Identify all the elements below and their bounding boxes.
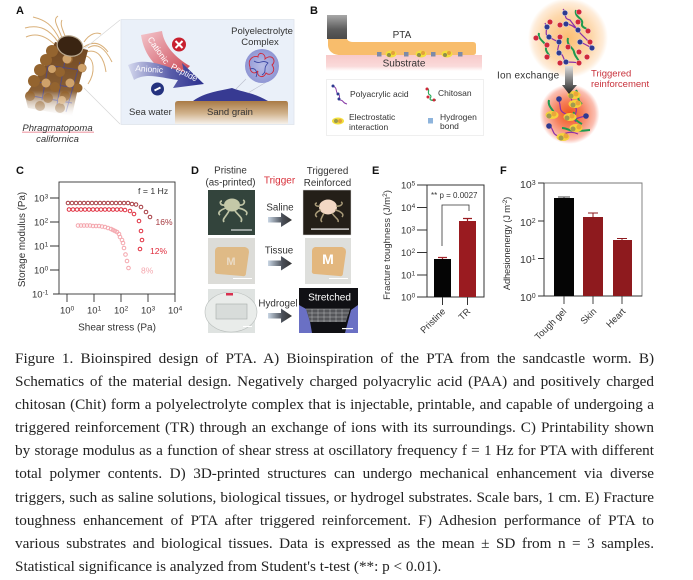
- legend: hydrogen bond: Hydrogen: [440, 112, 477, 122]
- complex title: Polyelectrolyte: [231, 26, 293, 37]
- y tick labels: 10: [401, 180, 412, 192]
- photo: stretched on hydrogel: [299, 288, 358, 333]
- series labels: 12%: [150, 246, 167, 256]
- x tick labels: [60, 306, 183, 316]
- photo: pristine octopus: [208, 190, 255, 235]
- trigger: saline: [266, 202, 294, 227]
- y tick labels: 10: [401, 270, 412, 282]
- axes: [417, 185, 484, 305]
- series labels: [138, 186, 173, 276]
- label F: F: [500, 165, 507, 177]
- figure caption: by storage modulus as a function of shear stress at oscillatory frequency f = 1 Hz for PTA with different: [15, 442, 654, 459]
- figure caption: [15, 350, 654, 575]
- legend: chitosan: Chitosan: [438, 88, 472, 98]
- trigger: hydrogel: Hydrogel: [258, 298, 298, 310]
- substrate: [326, 55, 482, 71]
- column headers: (as-printed): [205, 178, 256, 188]
- label A: A: [16, 5, 24, 17]
- category labels: [533, 306, 628, 342]
- bar: heart: [613, 238, 632, 296]
- y tick labels: 2: [45, 218, 49, 224]
- arrow: cationic peptide: [141, 31, 190, 78]
- axis titles: Storage modulus (Pa): [17, 192, 28, 287]
- trigger: hydrogel: [258, 298, 298, 323]
- x tick labels: 3: [152, 306, 156, 312]
- panel C: storage modulus chart: [16, 165, 183, 334]
- PTA layer: [328, 30, 476, 55]
- chart frame and axes: [50, 182, 175, 302]
- substrate: Substrate: [383, 58, 426, 70]
- category labels: Heart: [604, 306, 628, 329]
- reinforced polymer cluster: [540, 84, 600, 144]
- y tick labels: 5: [412, 180, 416, 188]
- x tick labels: 4: [179, 306, 183, 312]
- panel B: material design schematic: [310, 0, 649, 144]
- y axis title: 2: [382, 193, 389, 197]
- axis titles: [17, 192, 156, 334]
- y tick labels: -1: [43, 290, 49, 296]
- photo: pristine on tissue: [208, 238, 255, 284]
- series labels: 8%: [141, 266, 154, 276]
- y tick labels: 10: [401, 226, 412, 236]
- photo: pristine on hydrogel: [205, 289, 257, 333]
- panel F: adhesion energy chart: [500, 165, 642, 342]
- category labels: Tough gel: [533, 306, 568, 342]
- sand grain: Sand grain: [207, 107, 253, 118]
- y axis title: ): [382, 190, 393, 193]
- label E: E: [372, 165, 379, 177]
- pre-exchange polymer cluster: [528, 0, 608, 78]
- y tick labels: 3: [532, 180, 536, 187]
- y tick labels: 1: [45, 242, 49, 248]
- legend: electrostatic interaction: Electrostatic: [349, 112, 396, 122]
- category labels: Pristine: [418, 306, 447, 335]
- photo: stretched on hydrogel: Stretched: [308, 292, 351, 304]
- x tick labels: 10: [87, 306, 98, 316]
- inset: polyelectrolyte complex formation: [121, 20, 294, 124]
- series: 8%: [76, 224, 130, 270]
- photo: reinforced on tissue: M: [322, 251, 334, 267]
- icon: positive charge: [172, 38, 186, 52]
- y tick labels: 10: [401, 292, 412, 304]
- figure caption: triggered reinforcement (TR) through an exchange of ions with its surroundings. C) Printability shown: [15, 419, 654, 436]
- sand grain: [175, 101, 288, 124]
- label D: D: [191, 165, 199, 177]
- y tick labels: 2: [412, 248, 416, 255]
- legend: hydrogen bond: bond: [440, 121, 459, 131]
- y tick labels: 1: [412, 270, 416, 278]
- axis titles: Shear stress (Pa): [78, 322, 156, 334]
- y tick labels: 10: [520, 179, 532, 191]
- column headers: Trigger: [264, 176, 296, 186]
- figure caption: Statistical significance is analyzed from Student's t-test (**: p < 0.01).: [15, 558, 441, 575]
- panel D: triggered reinforcement photos: [191, 165, 358, 333]
- legend: hydrogen bond: [428, 112, 477, 131]
- figure caption: triggers, such as saline solutions, biological tissues, or hydrogel substrates. Scale bars, 1 cm. E) Fracture: [15, 489, 654, 506]
- legend box: [326, 80, 484, 136]
- x tick labels: 1: [98, 306, 102, 312]
- trigger: saline: Saline: [266, 202, 294, 214]
- ion exchange label: Ion exchange: [497, 70, 560, 82]
- figure caption: toughness enhancement of PTA after triggered reinforcement. F) Adhesion performance of PTA to: [15, 512, 654, 529]
- category labels: Skin: [579, 306, 598, 326]
- triggered reinforcement label: Triggered: [591, 68, 631, 80]
- column headers: Reinforced: [304, 178, 351, 189]
- icon: negative charge: [151, 82, 164, 96]
- x tick labels: 10: [60, 306, 71, 316]
- y tick labels: 10: [34, 266, 45, 276]
- inset: polyelectrolyte complex formation: Cationic: [146, 35, 172, 66]
- triggered reinforcement label: [591, 68, 649, 90]
- y axis title: Fracture toughness (J/m: [382, 197, 393, 300]
- column headers: [205, 166, 351, 189]
- legend: chitosan: [426, 88, 472, 102]
- arrow: anionic peptide: [128, 62, 204, 88]
- legend: electrostatic interaction: interaction: [349, 122, 388, 132]
- category labels: TR: [457, 306, 473, 322]
- y tick labels: 0: [532, 293, 536, 300]
- y tick labels: 10: [34, 218, 45, 228]
- species name: californica: [36, 134, 79, 145]
- y tick labels: 2: [532, 218, 536, 225]
- species name: [22, 123, 94, 145]
- y tick labels: [520, 179, 536, 304]
- series: 16%: [66, 201, 152, 219]
- y tick labels: 10: [34, 194, 45, 204]
- sea water label: Sea water: [129, 107, 172, 118]
- bar: TR: [459, 218, 476, 297]
- column headers: Triggered: [307, 166, 348, 177]
- y tick labels: 3: [412, 226, 416, 232]
- series: 12%: [67, 208, 144, 251]
- x tick labels: 0: [71, 306, 75, 312]
- photo: pristine on tissue: M: [226, 256, 236, 268]
- x tick labels: 2: [125, 306, 129, 312]
- y tick labels: 10: [520, 292, 532, 304]
- panel A: sandcastle worm bioinspiration: [16, 5, 294, 145]
- trigger: tissue: [265, 246, 294, 270]
- inset: polyelectrolyte complex formation: Peptide: [169, 61, 200, 84]
- figure caption: Schematics of the material design. Negatively charged polyacrylic acid (PAA) and positively charged: [15, 373, 654, 390]
- y axis title: -2: [502, 199, 509, 205]
- bonds at interface: [377, 50, 462, 58]
- y tick labels: 0: [412, 292, 416, 300]
- legend: polyacrylic acid: Polyacrylic acid: [350, 89, 409, 99]
- y tick labels: 3: [45, 194, 49, 200]
- figure caption: Figure 1. Bioinspired design of PTA. A) Bioinspiration of the PTA from the sandcastle worm. B): [15, 350, 654, 367]
- category labels: [418, 306, 473, 335]
- y tick labels: 10: [32, 290, 43, 300]
- x tick labels: 10: [114, 306, 125, 316]
- x tick labels: 10: [141, 306, 152, 316]
- column headers: Pristine: [214, 166, 247, 176]
- y axis title: Adhesionenergy (J m: [501, 205, 512, 290]
- y tick labels: [401, 180, 416, 304]
- legend: electrostatic interaction: [332, 112, 396, 132]
- complex title: [231, 26, 293, 48]
- y tick labels: [32, 194, 49, 300]
- y tick labels: 10: [520, 254, 532, 266]
- x tick labels: 10: [168, 306, 179, 316]
- y tick labels: 1: [532, 255, 536, 262]
- figure panels: [16, 0, 650, 342]
- icon: polymer network circle: [245, 49, 279, 83]
- y tick labels: 10: [401, 248, 412, 259]
- trigger: tissue: Tissue: [265, 246, 294, 256]
- series labels: 16%: [156, 217, 173, 227]
- complex title: Complex: [241, 37, 279, 48]
- label C: C: [16, 165, 24, 177]
- bar: skin: [583, 213, 603, 296]
- species name: Phragmatopoma: [22, 123, 93, 134]
- legend: polyacrylic acid: [332, 84, 409, 104]
- figure caption: total polymer contents. D) 3D-printed structures can undergo mechanical enhancement via diverse: [15, 465, 654, 482]
- axes: [538, 183, 642, 304]
- y tick labels: 10: [34, 242, 45, 252]
- figure caption: chitosan (Chit) form a polyelectrolyte complex that is injectable, printable, and capable of undergoing a: [15, 396, 654, 413]
- series labels: f = 1 Hz: [138, 186, 168, 196]
- icon: printing nozzle: [327, 15, 347, 39]
- complex blob on sand: [193, 88, 268, 101]
- arrow: ion exchange: [562, 66, 577, 94]
- figure caption: various substrates and biological tissues. Data is expressed as the mean ± SD from n = 3 samples.: [15, 535, 654, 552]
- panel E: fracture toughness chart: [372, 165, 484, 335]
- icon: sandcastle worm: [22, 16, 112, 122]
- bar: pristine: [434, 258, 451, 297]
- y tick labels: 10: [520, 217, 532, 229]
- photo: reinforced octopus: [303, 190, 351, 235]
- significance bracket: ** p = 0.0027: [431, 191, 478, 200]
- y tick labels: 10: [401, 203, 412, 214]
- bar: tough gel: [554, 197, 574, 296]
- triggered reinforcement label: reinforcement: [591, 79, 649, 90]
- y tick labels: 4: [412, 203, 416, 210]
- y axis title: ): [501, 197, 512, 200]
- y tick labels: 0: [45, 266, 49, 272]
- inset: polyelectrolyte complex formation: Anionic: [135, 63, 164, 75]
- PTA layer: PTA: [393, 30, 412, 41]
- significance bracket: [431, 191, 478, 246]
- label B: B: [310, 5, 318, 17]
- photo: reinforced on tissue: [305, 238, 351, 284]
